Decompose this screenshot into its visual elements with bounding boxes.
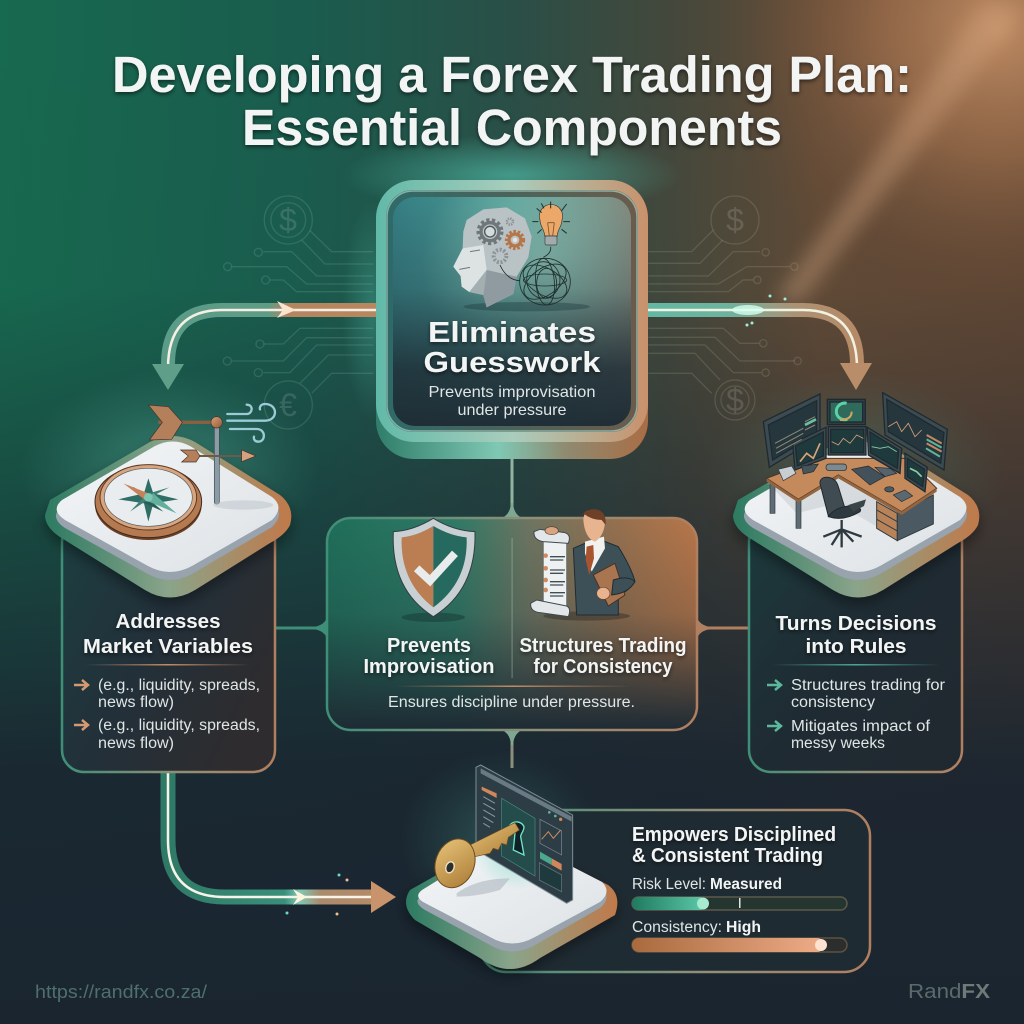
- icon: shield with check: [393, 518, 475, 622]
- heading: [632, 824, 836, 867]
- arrow: center card to left card: [152, 301, 378, 390]
- icon: compass and weather vane: [95, 404, 275, 540]
- gauge: consistency: [632, 919, 847, 952]
- list: bullets: [767, 677, 945, 752]
- arrow: left card to bottom card: [168, 772, 396, 916]
- faint currency symbols: $: [279, 202, 297, 238]
- heading: Market Variables: [83, 636, 253, 658]
- heading: Turns Decisions: [776, 613, 936, 635]
- center connectors: [276, 455, 749, 768]
- panel: empowers disciplined and consistent trading: [406, 765, 870, 972]
- labels: for Consistency: [534, 656, 673, 678]
- list: bullets: (e.g., liquidity, spreads,: [98, 677, 260, 694]
- platform: left: [45, 436, 291, 598]
- list: bullets: news flow): [98, 735, 174, 752]
- platform: bottom: [406, 840, 617, 969]
- list: bullets: news flow): [98, 694, 174, 711]
- labels: Structures Trading: [520, 635, 686, 657]
- list: bullets: (e.g., liquidity, spreads,: [98, 717, 260, 734]
- footer url: https://randfx.co.za/: [35, 982, 207, 1002]
- title: Essential Components: [242, 99, 782, 156]
- description: Prevents improvisation: [428, 384, 596, 401]
- list: bullets: messy weeks: [791, 735, 885, 752]
- heading: & Consistent Trading: [632, 845, 823, 867]
- gauge: consistency: High: [726, 919, 761, 936]
- circuit pattern: left: [223, 196, 373, 429]
- panel: turns decisions into rules: [733, 393, 979, 772]
- heading: [83, 611, 253, 658]
- icon: businessman with scroll: [531, 509, 635, 621]
- faint currency symbols: [279, 202, 744, 423]
- gauge: risk level: Measured: [710, 876, 782, 893]
- icon: trading desk with monitors: [763, 393, 947, 547]
- arrow: center card to right card: [646, 294, 872, 390]
- footer brand: Rand FX: [908, 981, 991, 1003]
- faint currency symbols: €: [279, 387, 297, 423]
- heading: Guesswork: [424, 347, 601, 379]
- gauge: risk level: [632, 876, 847, 910]
- heading: into Rules: [806, 636, 906, 658]
- labels: Prevents: [387, 635, 471, 657]
- list: bullets: Structures trading for: [791, 677, 945, 694]
- panel: prevents improvisation and structures trading: [327, 509, 697, 730]
- faint currency symbols: $: [726, 202, 744, 238]
- circuit pattern: right: [648, 196, 801, 420]
- heading: [776, 613, 936, 658]
- platform: right: [733, 436, 979, 598]
- labels: Improvisation: [364, 656, 494, 678]
- faint currency symbols: $: [726, 382, 744, 418]
- panel: eliminates guesswork: [376, 180, 648, 459]
- heading: Addresses: [116, 611, 220, 633]
- panel: addresses market variables: [45, 404, 291, 772]
- list: bullets: [74, 677, 260, 752]
- gauge: risk level: Risk Level:: [632, 876, 706, 893]
- icon: key in screen lock: [428, 765, 573, 903]
- icon: head with gears, bulb and tangled line: [453, 202, 590, 311]
- heading: [424, 317, 601, 379]
- description: under pressure: [458, 402, 567, 419]
- sub-icon: monitors: [763, 393, 947, 492]
- title: Developing a Forex Trading Plan:: [112, 46, 912, 103]
- description: Ensures discipline under pressure.: [388, 694, 635, 711]
- labels: [364, 635, 686, 678]
- heading: Empowers Disciplined: [632, 824, 836, 846]
- list: bullets: Mitigates impact of: [791, 718, 931, 735]
- title: [112, 46, 912, 156]
- list: bullets: consistency: [791, 694, 875, 711]
- description: [428, 384, 596, 419]
- heading: Eliminates: [428, 317, 596, 349]
- gauge: consistency: Consistency:: [632, 919, 722, 936]
